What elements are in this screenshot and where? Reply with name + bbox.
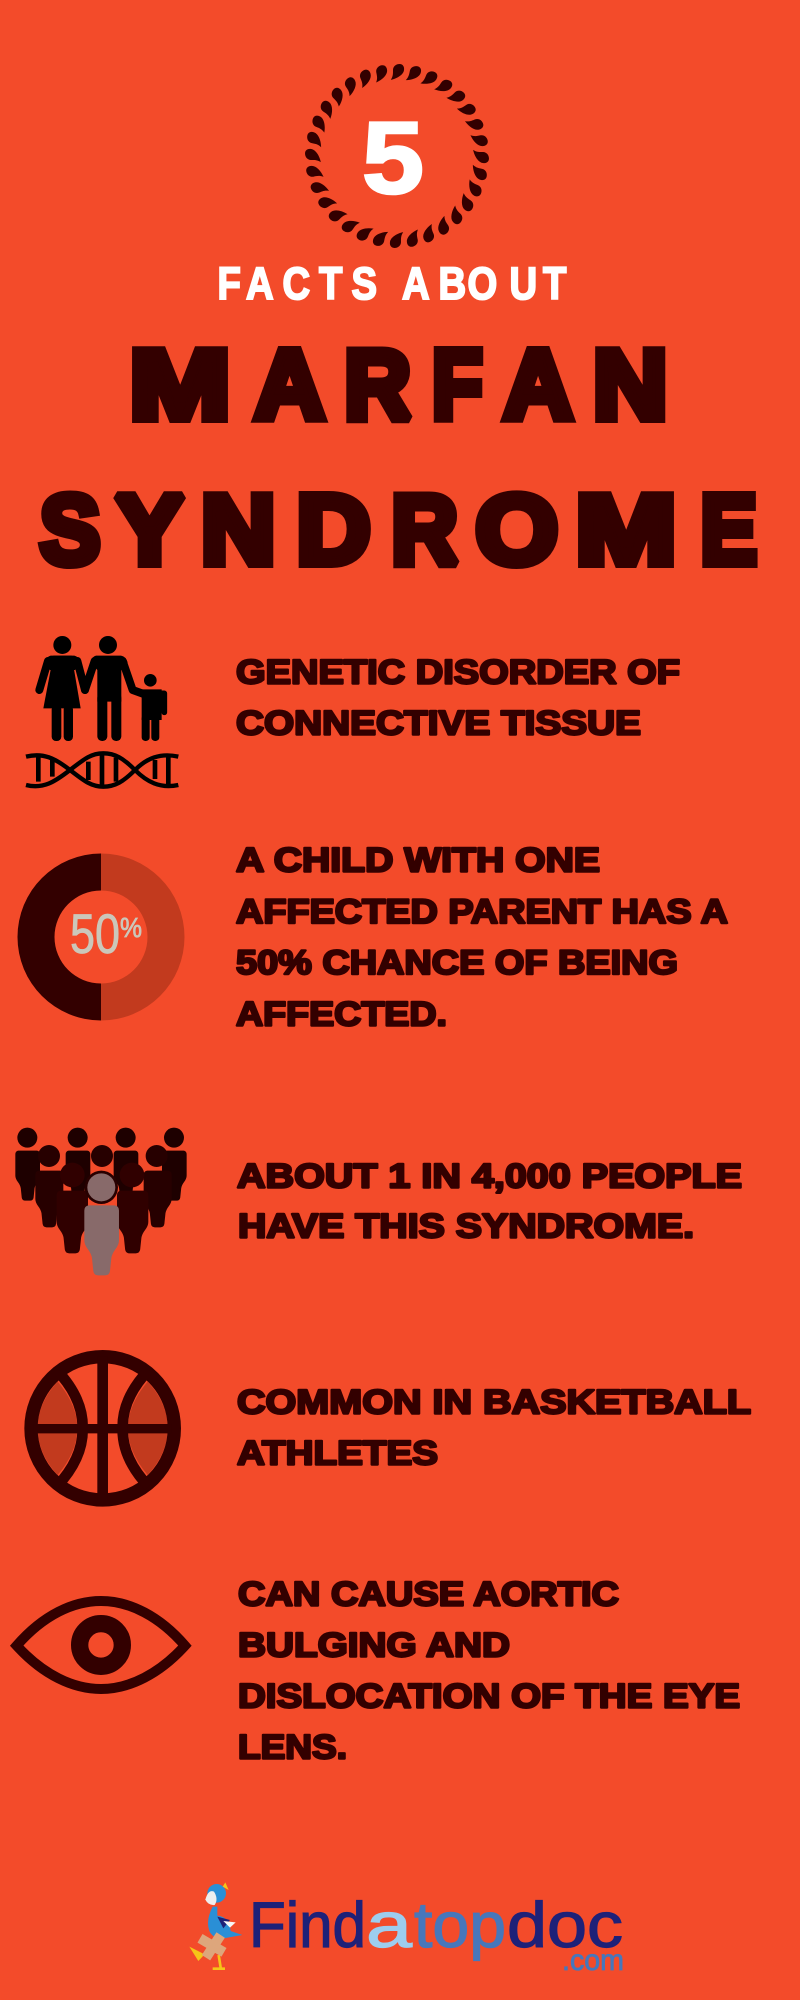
fact text: aortic bulging <box>238 1576 740 1766</box>
highlighted person <box>84 1171 119 1275</box>
title: syndrome: S <box>40 474 100 584</box>
back row <box>15 1128 187 1201</box>
fact text: fifty percent chance <box>236 842 728 1034</box>
icon: woman <box>39 636 85 741</box>
logo wordmark: a <box>366 1889 413 1961</box>
fact text: genetic disorder <box>236 654 680 742</box>
icon: dna helix <box>26 753 178 787</box>
logo mascot: duck with bandage <box>189 1882 242 1969</box>
title: marfan: M <box>130 330 230 440</box>
logo domain: .com <box>562 1944 624 1977</box>
fact text: fifty percent chance: AFFECTED. <box>236 996 447 1034</box>
fact text: aortic bulging: CAN CAUSE AORTIC <box>238 1576 619 1614</box>
fact text: basketball athletes: ATHLETES <box>237 1434 438 1472</box>
logo wordmark: doc <box>507 1889 623 1961</box>
fact text: one in four thousand: ABOUT 1 IN 4,000 PEOPLE <box>237 1158 742 1196</box>
title: syndrome: R <box>391 474 458 584</box>
fact text: aortic bulging: DISLOCATION OF THE EYE <box>238 1678 740 1716</box>
title: marfan: A <box>254 330 325 440</box>
icon: basketball <box>31 1357 174 1500</box>
title: marfan: F <box>432 330 482 440</box>
title: syndrome: Y <box>116 474 184 584</box>
title: syndrome: N <box>201 474 276 584</box>
fact text: basketball athletes <box>237 1384 751 1472</box>
number five: 5 <box>362 101 424 215</box>
fact text: one in four thousand <box>237 1158 742 1246</box>
fact text: fifty percent chance: 50% CHANCE OF BEING <box>236 944 678 982</box>
fact text: one in four thousand: HAVE THIS SYNDROME. <box>238 1208 694 1246</box>
subtitle: facts about: FACTS ABOUT <box>218 258 567 309</box>
title: syndrome: O <box>476 474 558 584</box>
icon: ring of drops <box>305 64 489 248</box>
title: syndrome: M <box>576 474 676 584</box>
fact text: aortic bulging: BULGING AND <box>238 1626 510 1664</box>
title: marfan: R <box>344 330 411 440</box>
icon: eye <box>17 1601 185 1689</box>
donut label: 50 <box>70 902 120 965</box>
middle row <box>35 1145 172 1227</box>
title: syndrome: D <box>296 474 370 584</box>
fact text: genetic disorder: CONNECTIVE TISSUE <box>236 704 641 742</box>
title: syndrome: E <box>700 474 757 584</box>
logo wordmark: top <box>414 1889 506 1961</box>
title: marfan: A <box>504 330 573 440</box>
fact text: aortic bulging: LENS. <box>238 1728 347 1766</box>
fact text: fifty percent chance: A CHILD WITH ONE <box>236 842 600 880</box>
logo wordmark: Find <box>249 1889 366 1961</box>
fact text: basketball athletes: COMMON IN BASKETBALL <box>237 1384 751 1422</box>
icon: child <box>142 674 164 741</box>
donut label: % <box>120 912 142 943</box>
title: marfan: N <box>593 330 668 440</box>
front row <box>57 1163 148 1253</box>
icon: man <box>85 636 143 741</box>
icon: crowd of people <box>15 1128 187 1275</box>
fact text: fifty percent chance: AFFECTED PARENT HAS A <box>236 893 728 931</box>
chart: 50 percent donut <box>18 854 185 1020</box>
icon: family and dna <box>26 636 178 787</box>
fact text: genetic disorder: GENETIC DISORDER OF <box>236 654 680 692</box>
